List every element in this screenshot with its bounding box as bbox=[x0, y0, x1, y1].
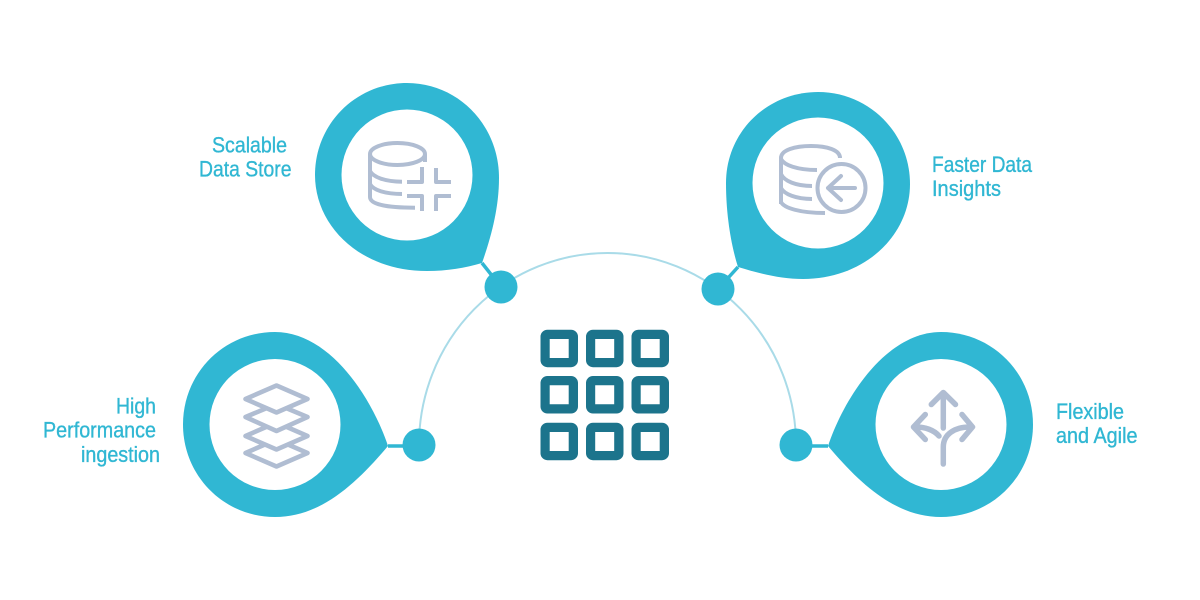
label: high performance ingestion: ingestion bbox=[81, 442, 160, 467]
label: flexible and agile bbox=[1056, 399, 1138, 448]
label: high performance ingestion bbox=[43, 394, 160, 467]
label: scalable data store: Scalable bbox=[212, 132, 287, 158]
connecting arc bbox=[419, 253, 796, 445]
icon: stacked layers bbox=[246, 386, 308, 466]
pin: scalable data store bbox=[315, 83, 518, 304]
label: flexible and agile: and Agile bbox=[1056, 423, 1138, 448]
label: high performance ingestion: Performance bbox=[43, 418, 156, 443]
label: scalable data store: Data Store bbox=[199, 157, 292, 182]
icon: database with plus bbox=[370, 143, 451, 211]
pin: faster data insights bbox=[702, 92, 910, 306]
label: faster data insights bbox=[932, 152, 1033, 201]
label: flexible and agile: Flexible bbox=[1056, 399, 1124, 424]
label: faster data insights: Faster Data bbox=[932, 152, 1033, 177]
icon: database with back arrow bbox=[781, 146, 866, 213]
label: scalable data store bbox=[199, 132, 292, 182]
icon: central grid of nine squares bbox=[540, 330, 669, 460]
pin: high performance ingestion bbox=[183, 332, 436, 517]
label: high performance ingestion: High bbox=[116, 394, 156, 418]
label: faster data insights: Insights bbox=[932, 176, 1001, 201]
icon: branching arrows bbox=[914, 392, 972, 464]
pin: flexible and agile bbox=[780, 332, 1033, 517]
